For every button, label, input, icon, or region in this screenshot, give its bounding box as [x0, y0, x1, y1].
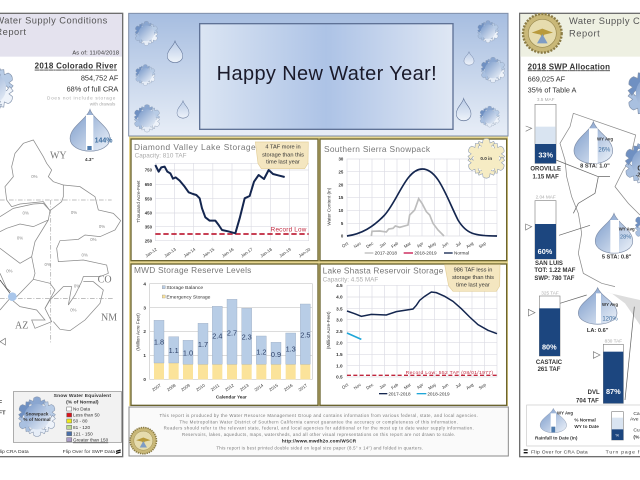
MWD bar chart: (Million Acre Feet) — [135, 313, 140, 351]
MWD bar chart: 2015 — [268, 382, 279, 392]
Shasta legend: 2018-2019 — [427, 391, 450, 396]
decorative snowflakes and drops — [132, 20, 507, 132]
map labels: state names: CO — [98, 274, 112, 285]
MWD bar chart: 2.7 — [227, 328, 237, 337]
map labels: percent of normal — [6, 174, 105, 312]
Shasta plot area: 4.0 — [336, 295, 343, 300]
panel: left Colorado River page — [0, 13, 123, 457]
map labels: percent of normal: 0% — [70, 307, 77, 312]
Sierra plot area: Dec — [365, 240, 375, 249]
legend: reservoir and rainfall key: WY Avg — [557, 411, 573, 416]
reservoir: Castaic: 325 TAF — [541, 290, 559, 295]
SWP allocation numbers: 35% of Table A — [528, 86, 577, 95]
DVL callout — [255, 142, 308, 169]
DVL callout: storage than this — [262, 152, 304, 158]
MWD bar chart: 2007 — [151, 382, 162, 392]
icon: southern drop, 5 station — [595, 213, 635, 261]
icon: Los Angeles drop: WY Avg — [602, 302, 618, 307]
map labels: percent of normal: 0% — [71, 210, 77, 215]
Sierra legend: 2018-2019 — [414, 251, 437, 256]
DVL plot area: Jan-13 — [163, 246, 177, 258]
legend: reservoir and rainfall key: Rainfall to Date (in) — [535, 435, 578, 440]
MWD legend — [162, 285, 211, 300]
map labels: percent of normal: 0% — [6, 268, 13, 273]
MWD bar chart: 2011 — [210, 382, 221, 392]
MWD title: MWD Storage Reserve Levels — [134, 265, 251, 275]
reservoir: Diamond Valley Lake: 704 TAF — [576, 399, 599, 405]
MWD bar chart: 2.5 — [300, 331, 310, 340]
Sierra plot area: Water Content (in) — [326, 187, 331, 226]
Shasta capacity: Capacity: 4.55 MAF — [323, 277, 378, 284]
map labels: percent of normal: 0% — [74, 283, 80, 288]
legend: reservoir and rainfall key: % Normal — [574, 417, 596, 422]
icon: gold snowflake with current snow: 0.0 in — [480, 156, 492, 161]
Colorado storage numbers: 854,752 AF — [81, 74, 119, 83]
right header title — [569, 16, 640, 39]
Sierra plot area: 25 — [339, 169, 344, 174]
icon: gold snowflake with current snow — [465, 138, 508, 178]
Sierra plot area — [326, 157, 497, 250]
Shasta plot area: 4.5 — [336, 283, 343, 288]
map labels: percent of normal: 0% — [17, 235, 23, 240]
reservoir: Oroville: 3.5 MAF — [537, 97, 555, 102]
MWD bar chart: 2016 — [283, 382, 294, 392]
map labels: percent of normal: 0% — [90, 237, 97, 242]
Shasta plot area: Jul — [454, 382, 462, 389]
right footer notes: Flip Over for CRA Data — [531, 449, 588, 455]
legend: reservoir and rainfall key — [527, 405, 640, 446]
icon: southern drop, 5 station: WY Avg — [619, 227, 635, 232]
Sierra plot area: Jan — [378, 240, 387, 249]
Shasta plot area: Sep — [478, 382, 487, 391]
legend: reservoir and rainfall key: Ave — [630, 417, 639, 423]
icon: Los Angeles drop: LA: 0.6" — [587, 328, 609, 334]
right header band — [520, 14, 640, 57]
Shasta plot area: 0.5 — [336, 375, 343, 380]
DVL plot area: Jan-18 — [259, 246, 273, 258]
Shasta plot area: Nov — [353, 382, 363, 391]
DVL callout: 4 TAF more in — [265, 145, 301, 151]
Sierra plot area: 5 — [341, 221, 344, 226]
map labels: percent of normal: 0% — [82, 252, 88, 257]
icon: northern Sierra snowflake — [621, 140, 640, 186]
Sierra legend: Normal — [454, 251, 469, 256]
legend: reservoir and rainfall key: Cu — [633, 428, 640, 434]
DVL callout: time last year — [266, 160, 300, 166]
reservoir: San Luis: SWP: 780 TAF — [534, 276, 575, 282]
map labels: state names — [15, 151, 117, 332]
reservoir: Castaic: CASTAIC — [536, 360, 563, 366]
reservoir: Diamond Valley Lake — [576, 338, 623, 405]
Shasta plot area: 3.5 — [336, 306, 343, 311]
Sierra title: Southern Sierra Snowpack — [324, 144, 431, 154]
Shasta legend — [379, 391, 450, 396]
MWD bar chart: 2010 — [195, 382, 206, 392]
Sierra plot area: 20 — [339, 182, 344, 187]
Colorado storage numbers — [47, 74, 119, 107]
DVL plot area: Jan-17 — [240, 246, 254, 258]
reservoir: Oroville: 33% — [538, 150, 553, 159]
icon: flip arrow — [524, 450, 528, 453]
reservoir: Castaic: 261 TAF — [538, 367, 561, 373]
Shasta plot area: Oct — [341, 382, 350, 390]
Sierra plot area: Oct — [341, 240, 350, 249]
icon: Lake Powell marker — [8, 292, 17, 301]
DVL plot area: 450 — [145, 211, 153, 216]
icon: right seal — [523, 14, 562, 53]
icon: southern drop, 5 station: 5 STA: 0.8" — [602, 255, 632, 261]
chart panel: Southern Sierra Snowpack — [320, 138, 508, 261]
icon: northern drop, 8 station: 8 STA: 1.0" — [580, 163, 610, 169]
legend: reservoir and rainfall key: WY to Date — [574, 424, 599, 429]
MWD bar chart: 1.3 — [286, 345, 296, 354]
Sierra plot area: Mar — [403, 240, 412, 249]
icon: flip arrow — [116, 450, 121, 453]
map labels: percent of normal: 0% — [45, 262, 51, 267]
reservoir: Castaic: 80% — [542, 343, 557, 352]
disclaimer text: This report is best printed double sided on legal size paper (8.5" x 14") and folded in quarters. — [216, 446, 423, 451]
DVL plot area: Jan-16 — [221, 246, 235, 258]
chart panel: MWD Storage Reserve Levels — [131, 264, 318, 405]
icon: snowflake — [0, 63, 17, 113]
reservoir: San Luis: SAN LUIS — [535, 261, 563, 267]
MWD bar chart: 1.7 — [198, 340, 208, 349]
legend: snow water equivalent: 50 - 80 — [73, 419, 88, 424]
reservoir: San Luis: 60% — [538, 247, 553, 256]
MWD bar chart: 2 — [143, 329, 146, 334]
Shasta plot area: 3.0 — [336, 317, 343, 322]
MWD bar chart: 1.0 — [183, 349, 193, 358]
DVL plot area: Jan-19 — [278, 246, 292, 258]
DVL plot area: 550 — [145, 196, 153, 201]
Shasta plot area: Aug — [465, 382, 475, 391]
disclaimer text: Readers should refer to the relevant state, federal, and local agencies for additional or for the most up to date water supply information. — [164, 425, 474, 430]
DVL plot area: Record Low — [271, 227, 307, 234]
icon: northern drop, 8 station: WY Avg — [597, 137, 613, 142]
Sierra plot area: 30 — [339, 157, 344, 162]
Sierra plot area: Jun — [441, 240, 450, 249]
legend: reservoir and rainfall key: (% — [633, 435, 640, 441]
DVL title: Diamond Valley Lake Storage — [134, 142, 256, 152]
left header band — [0, 14, 122, 57]
reservoir: San Luis: 2.04 MAF — [536, 194, 556, 199]
Shasta plot area: 1.5 — [336, 352, 343, 357]
SWP allocation heading: 2018 SWP Allocation — [528, 62, 610, 71]
Shasta plot area: May — [427, 382, 438, 391]
icon: Colorado rainfall drop: 144% — [95, 137, 113, 144]
Shasta title: Lake Shasta Reservoir Storage — [323, 266, 444, 276]
map labels: state names: NM — [101, 313, 117, 324]
MWD bar chart: 2014 — [253, 382, 265, 392]
Shasta callout: storage than this — [452, 275, 494, 281]
reservoir: Castaic — [528, 290, 563, 373]
reservoir: San Luis: TOT: 1.22 MAF — [534, 268, 576, 274]
chart panel: Diamond Valley Lake Storage — [131, 139, 318, 261]
MWD bar chart: 2.3 — [242, 333, 252, 342]
SWP allocation numbers: 669,025 AF — [528, 75, 566, 84]
panel: center background — [129, 136, 508, 406]
left footer notes: Flip Over for SWP Data — [63, 449, 115, 455]
legend: snow water equivalent: 121 - 150 — [73, 431, 93, 436]
Colorado storage numbers: 68% of full CRA — [67, 85, 118, 94]
icon: Colorado rainfall drop — [70, 109, 113, 162]
MWD bar chart: 4 — [143, 281, 146, 286]
Sierra plot area: Aug — [465, 240, 475, 249]
map: California — [556, 113, 640, 400]
disclaimer text — [159, 413, 478, 451]
map labels: state names: AZ — [15, 321, 28, 332]
Sierra plot area: 0 — [341, 234, 344, 239]
DVL plot area: 250 — [145, 238, 153, 243]
title box — [200, 24, 453, 129]
reservoir: Diamond Valley Lake: DVL — [588, 390, 600, 396]
legend: snow water equivalent: No Data — [73, 407, 90, 412]
Shasta plot area: Record Low: 552 TAF (08/01/1977) — [406, 370, 493, 376]
Shasta plot area: Feb — [390, 382, 400, 390]
Sierra plot area: Nov — [353, 240, 363, 249]
disclaimer text: This report is produced by the Water Resource Management Group and contains information from various federal, state, and local agencies. — [159, 413, 478, 418]
DVL capacity: Capacity: 810 TAF — [135, 153, 187, 160]
MWD bar chart: 1.1 — [169, 346, 179, 355]
icon: Los Angeles drop: 120% — [602, 317, 618, 323]
Sierra plot area: May — [427, 240, 438, 250]
MWD bar chart: 2008 — [166, 382, 177, 392]
DVL plot area: Jan-12 — [144, 246, 158, 258]
reservoir: San Luis — [526, 194, 576, 282]
map: Colorado River basin — [0, 140, 121, 343]
chart panel: Lake Shasta Reservoir Storage — [320, 264, 507, 405]
MWD bar chart: 3 — [143, 305, 146, 310]
panel: title banner — [129, 13, 508, 136]
DVL plot area: Jan-14 — [183, 246, 197, 258]
icon: reservoir indicator triangle — [0, 338, 5, 345]
Shasta callout: time last year — [456, 283, 490, 289]
legend: snow water equivalent: Greater than 150 — [73, 438, 109, 443]
MWD bar chart: 2013 — [239, 382, 250, 392]
Sierra legend — [365, 251, 469, 256]
legend: snow water equivalent: Snow Water Equivalent — [54, 393, 111, 399]
icon: Los Angeles drop — [578, 288, 618, 334]
map labels: percent of normal: 0% — [99, 224, 105, 229]
DVL plot area: 350 — [145, 224, 153, 229]
right header title: Report — [569, 29, 600, 39]
Sierra plot area: 15 — [339, 195, 344, 200]
DVL plot area: 750 — [145, 168, 153, 173]
icon: MWD seal — [130, 428, 156, 454]
Shasta plot area: 1.0 — [336, 363, 343, 368]
left footer notes — [0, 449, 115, 455]
icon: southern snowflake — [632, 211, 640, 243]
Shasta plot area: 2.0 — [336, 340, 343, 345]
Sierra plot area: Sep — [478, 240, 487, 249]
legend: snow water equivalent: Less than 50 — [73, 413, 100, 418]
MWD bar chart: 1 — [143, 353, 146, 358]
Shasta legend: 2017-2018 — [388, 391, 411, 396]
Shasta plot area: Jan — [378, 382, 387, 390]
Shasta plot area: Jun — [441, 382, 450, 390]
reservoir: Diamond Valley Lake: 87% — [606, 387, 621, 396]
left header title — [0, 15, 108, 37]
Colorado River heading: 2018 Colorado River — [35, 62, 117, 71]
Shasta plot area — [326, 283, 497, 391]
icon: northern drop, 8 station — [574, 122, 613, 169]
map labels: percent of normal: 0% — [31, 174, 38, 179]
Shasta plot area: Dec — [365, 382, 375, 391]
cut-off storage labels — [0, 400, 6, 416]
disclaimer text: http://www.mwdh2o.com/WSCR — [282, 439, 357, 444]
Colorado storage numbers: with drawals — [90, 102, 116, 107]
MWD bar chart: 0 — [143, 377, 146, 382]
reservoir: Oroville — [526, 97, 561, 180]
MWD bar chart — [135, 281, 312, 399]
MWD bar chart: 0.9 — [271, 350, 281, 359]
disclaimer text: The Metropolitan Water District of Southern California cannot guarantee the accuracy or completeness of this information. — [179, 419, 458, 424]
Shasta callout — [445, 265, 500, 291]
Sierra plot area: Feb — [390, 240, 400, 249]
reservoir: Diamond Valley Lake: 830 TAF — [605, 338, 622, 343]
icon: top snowflake — [624, 66, 640, 121]
legend: reservoir and rainfall key: % — [616, 433, 620, 438]
MWD bar chart: Calendar Year — [216, 394, 247, 399]
MWD bar chart: 2.4 — [212, 331, 222, 340]
reservoir: Oroville: OROVILLE — [530, 167, 561, 173]
MWD bar chart: 2009 — [180, 382, 191, 392]
icon: Colorado rainfall drop: 4.3" — [85, 157, 94, 162]
MWD legend: Storage Balance — [166, 285, 203, 291]
SWP allocation numbers — [528, 75, 577, 95]
map labels: percent of normal: 0% — [23, 211, 29, 216]
title text: Happy New Water Year! — [217, 63, 437, 85]
icon: northern drop, 8 station: 26% — [598, 147, 611, 153]
Shasta callout: 986 TAF less in — [454, 267, 492, 273]
MWD bar chart: 1.2 — [256, 347, 266, 356]
right footer notes — [531, 449, 640, 455]
DVL plot area: Jan-20 — [298, 246, 312, 258]
legend: reservoir and rainfall key: Ca — [633, 411, 640, 417]
MWD bar chart: 2017 — [297, 382, 309, 392]
DVL plot area — [136, 163, 312, 258]
Sierra plot area: 10 — [339, 208, 344, 213]
icon: southern drop, 5 station: 28% — [620, 235, 631, 241]
reservoir: Oroville: 1.15 MAF — [533, 174, 559, 180]
Colorado storage numbers: Does not include storage — [47, 96, 116, 101]
disclaimer text: Reservoirs, lakes, aqueducts, maps, watersheds, and all other visual representations on this report are not drawn to scale. — [182, 432, 455, 437]
Shasta plot area: 2.5 — [336, 329, 343, 334]
Sierra legend: 2017-2018 — [375, 251, 397, 256]
panel: center disclaimer footer — [129, 407, 508, 456]
DVL plot area: Jan-15 — [202, 246, 216, 258]
Sierra plot area: Apr — [416, 240, 425, 249]
MWD bar chart: 1.8 — [154, 338, 164, 347]
panel: right SWP page — [520, 13, 640, 457]
Shasta plot area: Mar — [403, 382, 412, 390]
legend: snow water equivalent: 81 - 120 — [73, 425, 90, 430]
MWD legend: Emergency Storage — [166, 294, 211, 300]
MWD bar chart: 2012 — [224, 382, 235, 392]
Shasta plot area: (Million Acre-Feet) — [326, 311, 331, 349]
legend: snow water equivalent: Snowpack — [25, 412, 49, 417]
Sierra plot area: Jul — [454, 241, 462, 248]
legend: snow water equivalent: (% of Normal) — [66, 399, 99, 405]
legend: snow water equivalent — [13, 392, 122, 443]
Shasta plot area: Apr — [416, 382, 425, 390]
as-of date: As of: 11/04/2018 — [72, 51, 119, 57]
DVL plot area: 650 — [145, 182, 153, 187]
DVL plot area: Thousand Acre-Feet — [136, 180, 141, 223]
map labels: state names: WY — [50, 151, 67, 162]
legend: snow water equivalent: % of Normal — [23, 417, 51, 422]
